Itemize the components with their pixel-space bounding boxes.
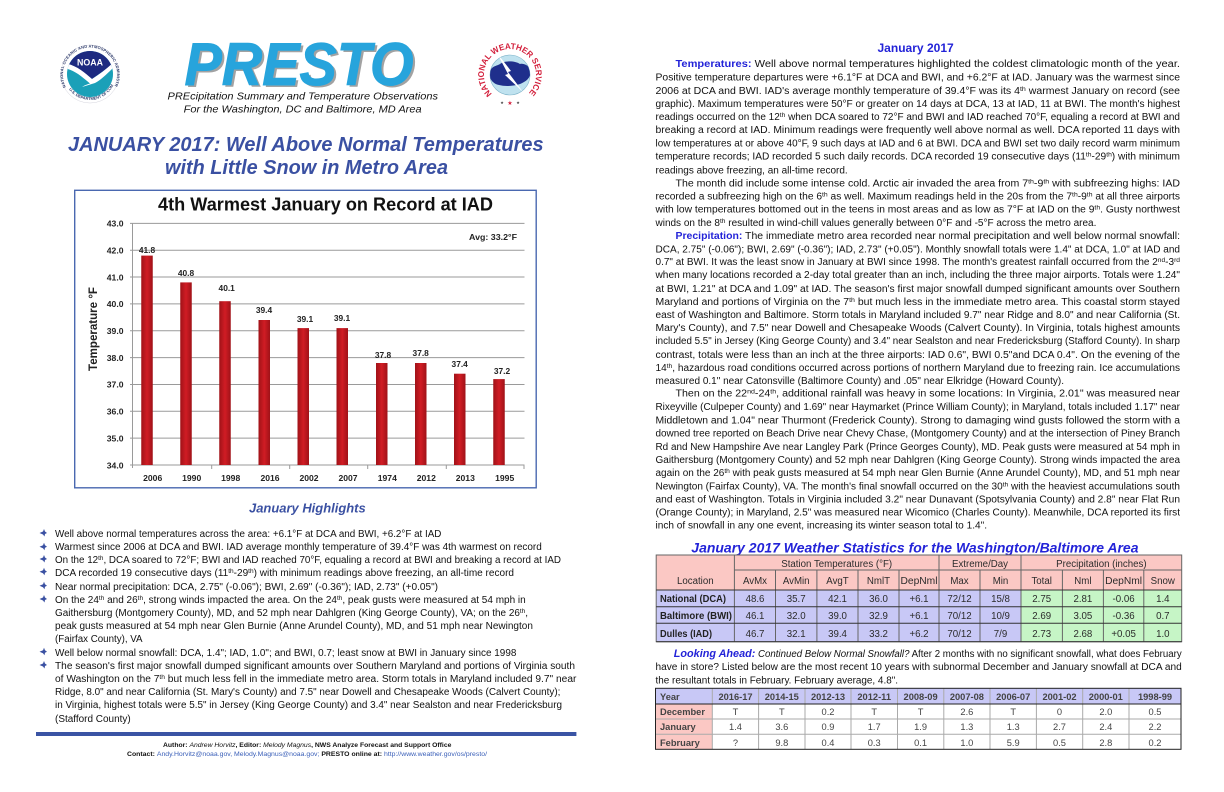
text block: late month rain and wind: downed tree reported on Beach Drive near Chevy Chase, (Montgomery County) and at the intersection of Piney Branch (656, 428, 1180, 440)
y axis labels: 39.0 (107, 326, 124, 336)
icon: National Weather Service logo: ★ (516, 100, 520, 105)
row: December: T (871, 707, 877, 717)
text block: temperatures: th (1094, 204, 1101, 212)
y axis labels: 41.0 (107, 272, 124, 282)
x axis labels: 2013 (456, 473, 475, 483)
row: National: 1.4 (1156, 594, 1170, 605)
text block: temperatures: resulted in wind-chill values generally between 0°F and -5°F across the metro area. (726, 218, 1096, 229)
row: January (660, 722, 1161, 732)
row: January: 1.7 (868, 722, 881, 732)
highlights list: On the 12 (55, 555, 99, 566)
row: January: January (660, 722, 696, 732)
column headers: DepNml (900, 576, 938, 587)
column headers: AvMx (743, 576, 767, 587)
text block: precipitation (654, 231, 1181, 387)
subtitle (168, 90, 439, 116)
text block: temperatures: warmest January on record (see (1026, 86, 1181, 97)
row: Dulles: +0.05 (1111, 629, 1136, 640)
x axis labels: 2002 (299, 473, 319, 483)
row: Dulles: 70/12 (947, 629, 972, 640)
text block: late month rain and wind: th (724, 468, 730, 475)
heading (68, 134, 544, 179)
text block: late month rain and wind: with the heaviest accumulations south (1008, 482, 1180, 492)
table: subnormal snowfall years (656, 688, 1181, 749)
text block: temperatures: Temperatures: Well above normal temperatures highlighted the coldest climatologic month of the year. (676, 59, 1180, 70)
row: February: 0.1 (914, 738, 927, 748)
row: February: ? (733, 738, 738, 748)
highlights list: Well above normal temperatures across the area: +6.1°F at DCA and BWI, +6.2°F at IAD (55, 529, 441, 540)
text block: temperatures: th (780, 112, 786, 119)
text block: precipitation: 14 (656, 363, 666, 374)
row: December: December (660, 707, 705, 717)
highlights list: , DCA soared to 72°F; BWI and IAD reached 70°F, equaling a record at BWI and breaking a record at IAD (103, 555, 561, 566)
y axis labels: 40.0 (107, 299, 124, 309)
text block: temperatures: Positive temperature departures were +6.1°F at DCA and BWI, and +6.2°F at IAD. January was the warmest since (656, 72, 1181, 84)
text block: temperatures: th (1072, 192, 1078, 198)
text block: precipitation: measured 0.1" near Catonsville (Baltimore County) and .05" near Elkridge (Howard County). (656, 376, 1064, 387)
highlights list: but much less fell in the immediate metro area. Storm totals in Maryland included 9.7" near (165, 674, 577, 685)
group headers: Extreme/Day (952, 559, 1008, 570)
bar chart: 4th warmest January on record at IAD (75, 190, 536, 488)
data labels: 37.2 (494, 366, 510, 376)
heading: weather statistics: January 2017 Weather Statistics for the Washington/Baltimore Area (691, 539, 1139, 555)
header row: 1998-99 (1138, 692, 1172, 702)
highlights list: , peak gusts were measured at 54 mph in (342, 595, 526, 606)
text block: temperatures: 2006 at DCA and BWI. IAD's average monthly temperature of 39.4°F was its 4 (656, 86, 994, 97)
chart title: 4th Warmest January on Record at IAD (158, 194, 493, 214)
text block: temperatures: th (720, 218, 726, 225)
title: PRESTO wordmark: PRESTO (184, 31, 413, 98)
y axis labels: 36.0 (107, 406, 124, 416)
data labels: 41.8 (139, 245, 155, 255)
group headers: Precipitation (inches) (1056, 559, 1147, 570)
highlights list: th (337, 595, 343, 602)
row: Baltimore: 0.7 (1156, 611, 1170, 622)
row: December: T (733, 707, 739, 717)
row: Baltimore: 10/9 (991, 611, 1010, 622)
row: December: 2.0 (1099, 707, 1112, 717)
text block: temperatures: as well. Maximum readings held in the 20s from the 7 (828, 192, 1072, 202)
y axis labels: 35.0 (107, 434, 124, 444)
highlights list: and 26 (104, 595, 138, 606)
highlights list: th (248, 568, 254, 575)
text block: late month rain and wind: nd (747, 388, 755, 396)
header row: 2016-17 (718, 692, 753, 702)
text block: precipitation: included 5.5" in Jersey (King George County) and 3.4" near Sealston and near Fredericksburg (Stafford County). In sharp (656, 336, 1181, 347)
header row (660, 692, 1172, 702)
heading: January Highlights: January Highlights (249, 502, 366, 516)
data labels: 37.8 (375, 350, 391, 360)
text block: temperatures: th (1086, 152, 1092, 158)
text block: temperatures: readings occurred on the 12 (656, 112, 778, 123)
row: Baltimore: 46.1 (746, 611, 764, 622)
highlights list: th (520, 608, 526, 615)
highlights list: ) with minimum readings above freezing, an all-time record (254, 568, 514, 579)
text block: late month rain and wind: Then on the 22 (676, 388, 741, 400)
row: Baltimore: 32.0 (787, 611, 806, 622)
text block: temperatures: th (1028, 178, 1034, 186)
text block: temperatures: th (1043, 178, 1050, 186)
x axis labels: 1998 (221, 473, 240, 483)
text block: late month rain and wind (656, 388, 1181, 532)
text block: temperatures: winds on the 8 (656, 218, 719, 229)
text block: late month rain and wind: with peak gusts measured at 54 mph near Glen Burnie (Anne Arundel County), MD, and 51 mph near (730, 468, 1181, 479)
row: Dulles: 32.1 (787, 629, 806, 640)
footer credits: Contact: Andy.Horvitz@noaa.gov, Melody.Magnus@noaa.gov; PRESTO online at: http://www.weather.gov/os/presto/ (127, 751, 487, 758)
text block: late month rain and wind: and east of Washington. Totals in Virginia included 3.2" near Dunavant (Spotsylvania County) and 2.8" near Flat Run (656, 494, 1180, 506)
x axis labels: 2012 (417, 473, 436, 483)
group headers (781, 559, 1147, 570)
text block: precipitation: when many locations recorded a 2-day total greater than an inch, including the three major airports. Totals were 1.24" (654, 270, 1181, 281)
row: February: 0.3 (868, 738, 881, 748)
text block: temperatures: The month did include some intense cold. Arctic air invaded the area from 7 (676, 178, 1003, 190)
row: National: National (DCA) (660, 594, 726, 605)
row: December: T (918, 707, 924, 717)
row: Baltimore: 3.05 (1073, 611, 1092, 622)
row: Dulles: Dulles (IAD) (660, 629, 712, 640)
row: Dulles: 1.0 (1156, 629, 1170, 640)
icon: NOAA logo (60, 44, 120, 104)
row: National (660, 594, 1170, 605)
group headers: Station Temperatures (°F) (781, 559, 892, 570)
row: Baltimore: 39.0 (828, 611, 848, 622)
table: weather statistics (656, 555, 1182, 642)
row: Baltimore: +6.1 (909, 611, 929, 622)
row: January: 1.3 (960, 722, 973, 732)
text block: temperatures (654, 59, 1181, 229)
row: Baltimore: -0.36 (1113, 611, 1135, 622)
text block: late month rain and wind: , additional rainfall was heavy in some locations: In Virginia, 2.01" was measured near (776, 388, 1181, 400)
row: January: 1.9 (914, 722, 927, 732)
row: January: 2.4 (1099, 722, 1112, 732)
data labels: 40.8 (178, 268, 194, 278)
text block: late month rain and wind: Newington (Fairfax County), VA. The month's final snowfall occurred on the 30 (656, 482, 995, 492)
row: December: 0.5 (1149, 707, 1161, 717)
row: National: 35.7 (787, 594, 806, 605)
text block: late month rain and wind: Rd and New Hampshire Ave near Langley Park (Prince Georges County), MD. Peak gusts were measured at 54 mph in (656, 442, 1180, 453)
row: Dulles: 33.2 (869, 629, 888, 640)
y axis labels: 42.0 (107, 246, 124, 256)
text block: looking ahead: Looking Ahead: Continued Below Normal Snowfall? After 2 months with no significant snowfall, what does February (674, 648, 1182, 660)
row: December: T (779, 707, 785, 717)
row: National: 36.0 (869, 594, 889, 605)
header row: 2014-15 (765, 692, 799, 702)
x axis labels: 1990 (182, 473, 201, 483)
data labels: 39.1 (297, 314, 313, 324)
row: January: 0.9 (822, 722, 834, 732)
row: February: 0.5 (1053, 738, 1066, 748)
text block: temperatures: ) with minimum (1112, 152, 1180, 162)
text block: temperatures: th (1020, 86, 1026, 93)
text block: late month rain and wind: th (1003, 482, 1009, 488)
bullets (40, 529, 47, 668)
highlights list (40, 529, 577, 725)
text block: temperatures: at all three airports (1092, 192, 1180, 202)
highlights list: of Washington on the 7 (55, 674, 157, 685)
header row: 2008-09 (904, 692, 938, 702)
row: February: 9.8 (775, 738, 788, 748)
text block: precipitation: , hazardous road conditions occurred across portions of northern Maryland due to freezing rain. Ice accumulations (672, 363, 1180, 374)
row: National: 42.1 (828, 594, 847, 605)
column headers: DepNml (1105, 576, 1142, 587)
footer credits (127, 742, 487, 758)
highlights list: th (228, 568, 234, 575)
text block: looking ahead: the resultant totals in February. February average, 4.8". (656, 676, 898, 686)
highlights list: in Virginia, highest totals were 5.5" in Jersey (King George County) and 3.4" near Sealston and near Fredericksburg (55, 700, 562, 711)
row: Dulles: 46.7 (746, 629, 764, 640)
title: PRESTO wordmark: PRESTO (187, 33, 416, 100)
y axis labels: 43.0 (107, 218, 124, 228)
x axis labels: 1974 (378, 473, 397, 483)
text block: precipitation: Precipitation: The immediate metro area recorded near normal precipitation and well below normal snowfall: (676, 231, 1180, 242)
row: February: 0.2 (1149, 738, 1161, 748)
highlights list: Well below normal snowfall: DCA, 1.4"; IAD, 1.0"; and BWI, 0.7; least snow at BWI in January since 1998 (55, 648, 517, 659)
text block: precipitation: rd (1174, 257, 1180, 264)
highlights list: Ridge, 8.0" and near California (St. Mary's County) and 7.5" near Dowell and Chesapeake Woods (Calvert County); (55, 687, 560, 698)
row: National: 2.75 (1032, 594, 1051, 605)
data labels (139, 245, 510, 376)
text block: precipitation: -3 (1165, 257, 1175, 268)
text block: precipitation: th (667, 363, 673, 370)
header row: 2006-07 (996, 692, 1030, 702)
text block: temperatures: -29 (1092, 152, 1106, 162)
row: National: 15/8 (991, 594, 1010, 605)
header row: 2007-08 (950, 692, 984, 702)
y axis labels: 37.0 (107, 380, 124, 390)
text block: precipitation: east of Washington and Baltimore. Storm totals in Maryland included 9.7" near Ridge and 8.0" and near California (St. (656, 310, 1180, 321)
column headers: Location (677, 576, 714, 587)
column headers: AvMin (783, 576, 810, 587)
column headers: NmlT (867, 576, 890, 587)
text block: precipitation: 0.7" at BWI. It was the least snow in January at BWI since 1998. The month's greatest rainfall occurred from the 2 (656, 257, 1147, 268)
subtitle: For the Washington, DC and Baltimore, MD Area (184, 104, 422, 116)
x axis labels (143, 473, 514, 483)
row: Dulles (660, 629, 1170, 640)
text block: precipitation: but much less in the immediate metro area. This coastal storm stayed (855, 297, 1180, 308)
highlights list: Gaithersburg (Montgomery County), MD, and 52 mph near Dahlgren (King George County), VA; on the 26 (55, 608, 523, 619)
row: National: -0.06 (1113, 594, 1135, 605)
row: Baltimore: 2.69 (1032, 611, 1051, 622)
highlights list: th (159, 674, 165, 681)
row: February (660, 738, 1161, 748)
row: February: 2.8 (1099, 738, 1112, 748)
row: February: February (660, 738, 701, 748)
row: December: 2.6 (960, 707, 973, 717)
icon: National Weather Service logo: NATIONAL WEATHER SERVICE (478, 43, 542, 98)
heading: with Little Snow in Metro Area (165, 157, 448, 179)
row: National: 48.6 (746, 594, 764, 605)
row: February: 1.0 (960, 738, 973, 748)
highlights list: th (138, 595, 143, 602)
text block: temperatures: breaking a record at IAD. Minimum readings were frequently well above normal as well. DCA reported 11 days with (656, 125, 1180, 136)
bars (141, 256, 505, 465)
highlights list: th (99, 595, 105, 602)
column headers: Snow (1151, 576, 1176, 587)
text block: looking ahead (656, 648, 1182, 686)
highlights list: Warmest since 2006 at DCA and BWI. IAD average monthly temperature of 39.4°F was 4th warmest on record (55, 542, 542, 553)
row: January: 1.3 (1007, 722, 1020, 732)
row: February: 5.9 (1007, 738, 1020, 748)
row: National: 72/12 (947, 594, 972, 605)
row: December: 0 (1057, 707, 1062, 717)
footer rule (36, 732, 576, 736)
heading: January 2017: January 2017 (878, 41, 954, 55)
icon: NOAA logo: NOAA (77, 58, 103, 68)
highlights list: th (98, 555, 104, 562)
text block: precipitation: Mary's County), and 7.5" near Dowell and Chesapeake Woods (Calvert County). In Virginia, totals highest amounts (656, 323, 1180, 334)
column headers: Total (1031, 576, 1052, 587)
data labels: 39.1 (334, 313, 350, 323)
y axis labels: 38.0 (107, 353, 124, 363)
row: January: 3.6 (775, 722, 788, 732)
row: Baltimore: 70/12 (947, 611, 972, 622)
row: Dulles: 7/9 (994, 629, 1007, 640)
x axis labels: 2016 (260, 473, 280, 483)
row: National: 2.81 (1073, 594, 1092, 605)
text block: late month rain and wind: inch of snowfall in any one event, increasing its winter season total to 1.4". (656, 520, 987, 532)
highlights list: (Fairfax County), VA (55, 634, 143, 645)
icon: National Weather Service logo: ★ (507, 100, 513, 107)
subtitle: PREcipitation Summary and Temperature Observations (168, 90, 439, 102)
data labels: 39.4 (256, 305, 272, 315)
text block: late month rain and wind: Middletown and 1.04" near Thurmont (Frederick County). Strong to damaging wind gusts followed the storm with a (656, 416, 1181, 426)
row: January: 2.7 (1053, 722, 1066, 732)
x axis labels: 1995 (495, 473, 514, 483)
text block: late month rain and wind: Rixeyville (Culpeper County) and 1.69" near Haymarket (Prince William County); in Maryland, totals included 1.17" near (656, 402, 1181, 413)
column headers: Nml (1074, 576, 1092, 587)
header row: 2000-01 (1089, 692, 1123, 702)
text block: looking ahead: have in store? Listed below are the most recent 10 years with subnormal December and January snowfall at DCA and (656, 662, 1182, 673)
column headers (677, 576, 1176, 587)
row: Dulles: 2.73 (1032, 629, 1051, 640)
highlights list: , (525, 608, 528, 619)
data labels: 40.1 (219, 283, 235, 293)
highlights list: -29 (234, 568, 249, 579)
highlights list: The season's first major snowfall dumped significant amounts over Southern Maryland and portions of Virginia south (55, 661, 575, 672)
text block: precipitation: nd (1158, 257, 1166, 264)
highlights list: (Stafford County) (55, 714, 131, 725)
row: Baltimore (660, 611, 1170, 622)
row: Baltimore: Baltimore (BWI) (660, 611, 732, 622)
row: Dulles: 2.68 (1073, 629, 1092, 640)
highlights list: , strong winds impacted the area. On the 24 (143, 595, 337, 606)
header row: 2012-11 (857, 692, 891, 702)
header row: 2012-13 (811, 692, 845, 702)
text block: temperatures: . Gusty northwest (1100, 204, 1180, 216)
column headers: AvgT (826, 576, 849, 587)
text block: temperatures: th (1087, 192, 1093, 198)
row: December: T (1010, 707, 1016, 717)
row: January: 1.4 (729, 722, 742, 732)
icon: National Weather Service logo: ★ (500, 100, 504, 105)
header row: Year (660, 692, 680, 702)
text block: precipitation: DCA, 2.75" (-0.06"); BWI, 2.69" (-0.36"); IAD, 2.73" (+0.05"). Monthly snowfall totals were 1.4" at DCA, 1.0" at IAD and (656, 244, 1180, 256)
x axis labels: 2006 (143, 473, 162, 483)
highlights list: Near normal precipitation: DCA, 2.75" (-0.06"); BWI, 2.69" (-0.36"); IAD, 2.73" (+0.05") (55, 582, 438, 593)
row: February: 0.4 (822, 738, 834, 748)
text block: late month rain and wind: again on the 26 (656, 468, 723, 479)
highlights list: On the 24 (55, 595, 99, 606)
text block: temperatures: with subfreezing highs: IAD (1049, 178, 1180, 190)
text block: late month rain and wind: (Orange County); in Maryland, 2.5" was measured near Wicomico (Charles County). Meanwhile, DCA reported its first (656, 508, 1180, 518)
text block: temperatures: when DCA soared to 72°F and BWI and IAD reached 70°F, equaling a record at BWI and (785, 112, 1180, 123)
row: January: 2.2 (1149, 722, 1161, 732)
y axis title: Temperature °F (88, 287, 100, 371)
text block: temperatures: low temperatures at or above 40°F, 9 such days at IAD and 6 at BWI. DCA and BWI set two daily record warm minimum (656, 138, 1180, 150)
y axis labels: 34.0 (107, 460, 124, 470)
text block: late month rain and wind: Gaithersburg (Montgomery County) and 52 mph near Dahlgren (King George County). Strong winds impacted the area (656, 455, 1181, 466)
text block: temperatures: temperature records; IAD recorded 5 such daily records. DCA recorded 19 consecutive days (11 (656, 152, 1071, 162)
row: December (660, 707, 1161, 717)
text block: temperatures: with low temperatures bottomed out in the teens in most areas and as low as 7°F at IAD on the 9 (656, 204, 1074, 216)
text block: precipitation: th (849, 297, 855, 304)
column headers: Max (950, 576, 969, 587)
highlights list: peak gusts measured at 54 mph near Glen Burnie (Anne Arundel County), MD, and 51 mph near Newington (55, 621, 533, 632)
column headers: Min (993, 576, 1008, 587)
text block: late month rain and wind: -24 (755, 388, 771, 400)
y axis labels (107, 218, 124, 470)
row: Baltimore: 32.9 (869, 611, 888, 622)
text block: temperatures: th (822, 192, 828, 198)
row: Dulles: +6.2 (909, 629, 929, 640)
text block: precipitation: contrast, totals were less than an inch at the three airports: IAD 0.6", BWI 0.5"and DCA 0.4". On the evening of the (656, 350, 1181, 361)
row: December: 0.2 (822, 707, 834, 717)
text block: temperatures: graphic). Maximum temperatures were 50°F or greater on 14 days at DCA, 13 at IAD, 11 at BWI. The month's highest (656, 99, 1180, 110)
row: National: +6.1 (909, 594, 929, 605)
data labels: 37.8 (413, 348, 429, 358)
highlights list: DCA recorded 19 consecutive days (11 (55, 568, 228, 579)
row: Dulles: 39.4 (828, 629, 848, 640)
text block: precipitation: at BWI, 1.21" at DCA and 1.09" at IAD. The season's first major snowfall dumped significant amounts over Southern (656, 284, 1180, 295)
data labels: 37.4 (452, 359, 468, 369)
text block: late month rain and wind: th (770, 388, 777, 396)
text block: temperatures: -9 (1078, 192, 1087, 202)
text block: temperatures: -9 (1034, 178, 1043, 190)
header row: 2001-02 (1042, 692, 1077, 702)
text block: temperatures: readings above freezing, an all-time record. (656, 166, 848, 176)
text block: precipitation: Maryland and portions of Virginia on the 7 (656, 297, 837, 308)
average note: Avg: 33.2°F (469, 232, 517, 242)
text block: temperatures: recorded a subfreezing high on the 6 (656, 192, 815, 202)
x axis labels: 2007 (338, 473, 358, 483)
footer credits: Author: Andrew Horvitz, Editor: Melody Magnus, NWS Analyze Forecast and Support Office (163, 742, 452, 749)
text block: temperatures: th (1106, 152, 1112, 158)
heading: JANUARY 2017: Well Above Normal Temperatures (68, 134, 544, 156)
